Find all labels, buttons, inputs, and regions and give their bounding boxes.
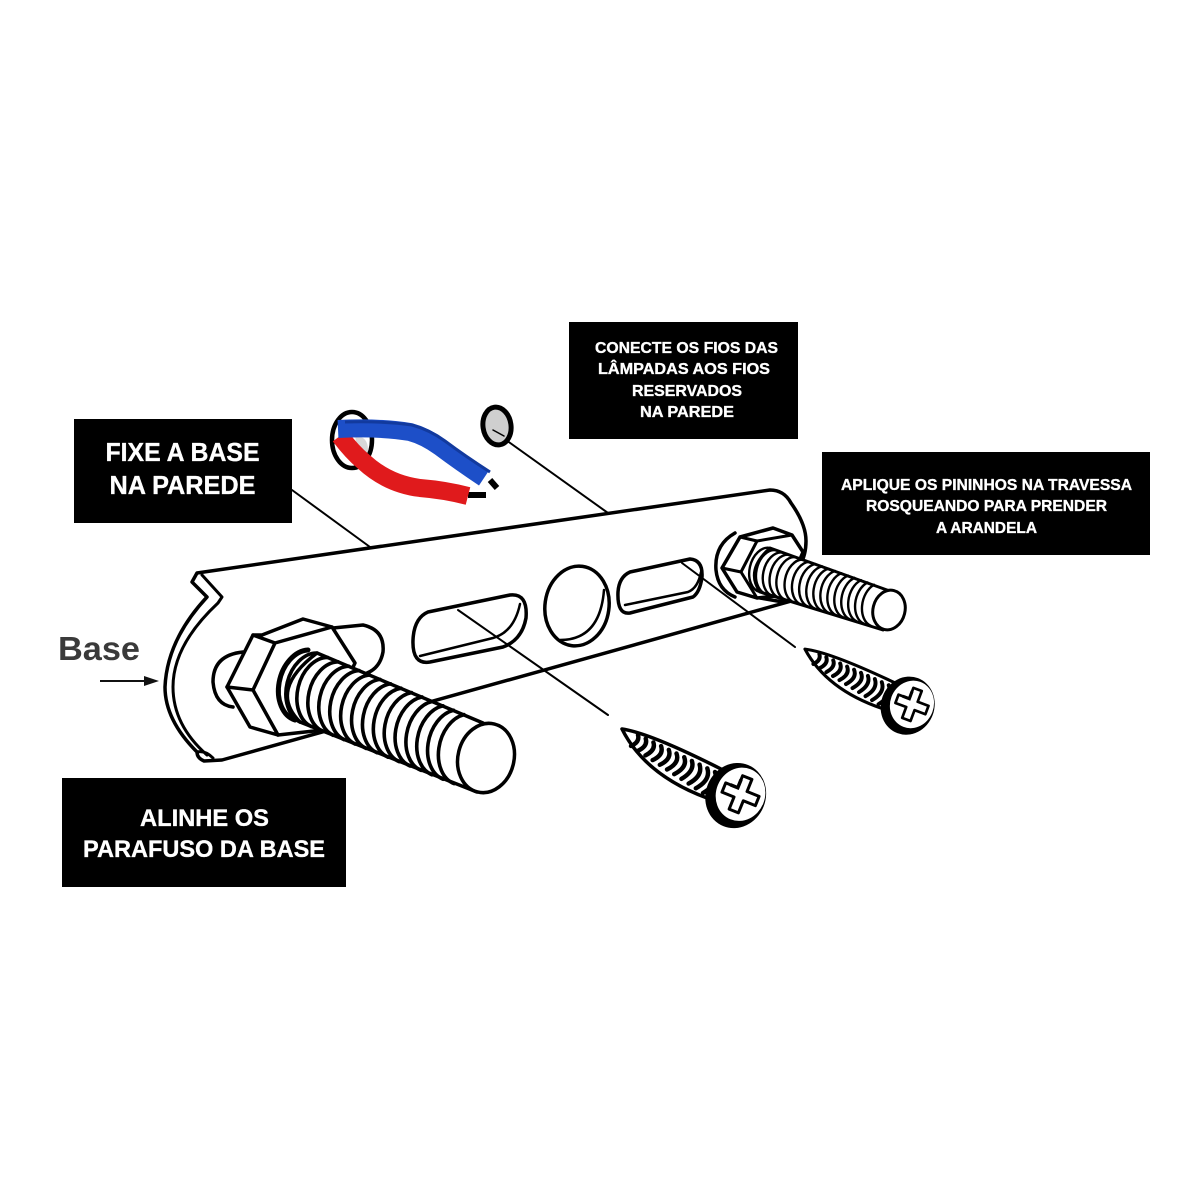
callout: fixe a base [74,419,292,523]
phillips cross [717,771,764,818]
wall ring right [480,405,514,447]
shaft tip [450,717,522,799]
callout: aplique os pininhos: ROSQUEANDO PARA PRENDER [866,498,1107,515]
wall ring left [332,412,372,468]
Base label [58,630,159,686]
right bolt with nut [716,528,909,633]
threaded shaft [278,650,483,792]
callout: fixe a base: NA PAREDE [110,470,256,500]
callout: conecte os fios [569,322,798,439]
callout: alinhe os parafuso: PARAFUSO DA BASE [83,836,325,863]
centre-left slot [413,595,526,662]
left bolt with nut [227,619,522,799]
callout: alinhe os parafuso [62,778,346,887]
callout: conecte os fios: LÂMPADAS AOS FIOS [598,360,770,378]
callout: aplique os pininhos: A ARANDELA [936,520,1037,537]
centre-right slot [618,559,702,613]
right shaft tip [869,587,909,633]
blue wire [338,422,497,488]
callout: conecte os fios: NA PAREDE [640,404,734,421]
nut [227,619,355,735]
right nut [722,528,803,598]
left bolt slot [213,625,383,707]
callout: alinhe os parafuso: ALINHE OS [140,805,269,832]
right threaded shaft [749,548,887,630]
Base label: Base [58,630,140,667]
wires [338,422,497,496]
screw bottom [622,729,776,837]
callout: fixe a base: FIXE A BASE [106,437,260,467]
callout: conecte os fios: CONECTE OS FIOS DAS [595,340,778,357]
callout: conecte os fios: RESERVADOS [632,383,742,400]
mounting plate [165,490,806,761]
central round hole [540,562,614,650]
leader lines [292,430,795,715]
callout: aplique os pininhos [822,452,1150,555]
screw head [696,754,776,837]
arrow to base [100,676,159,686]
red wire [340,436,486,496]
screw right [805,646,944,746]
callout: aplique os pininhos: APLIQUE OS PININHOS NA TRAVESSA [841,477,1132,494]
